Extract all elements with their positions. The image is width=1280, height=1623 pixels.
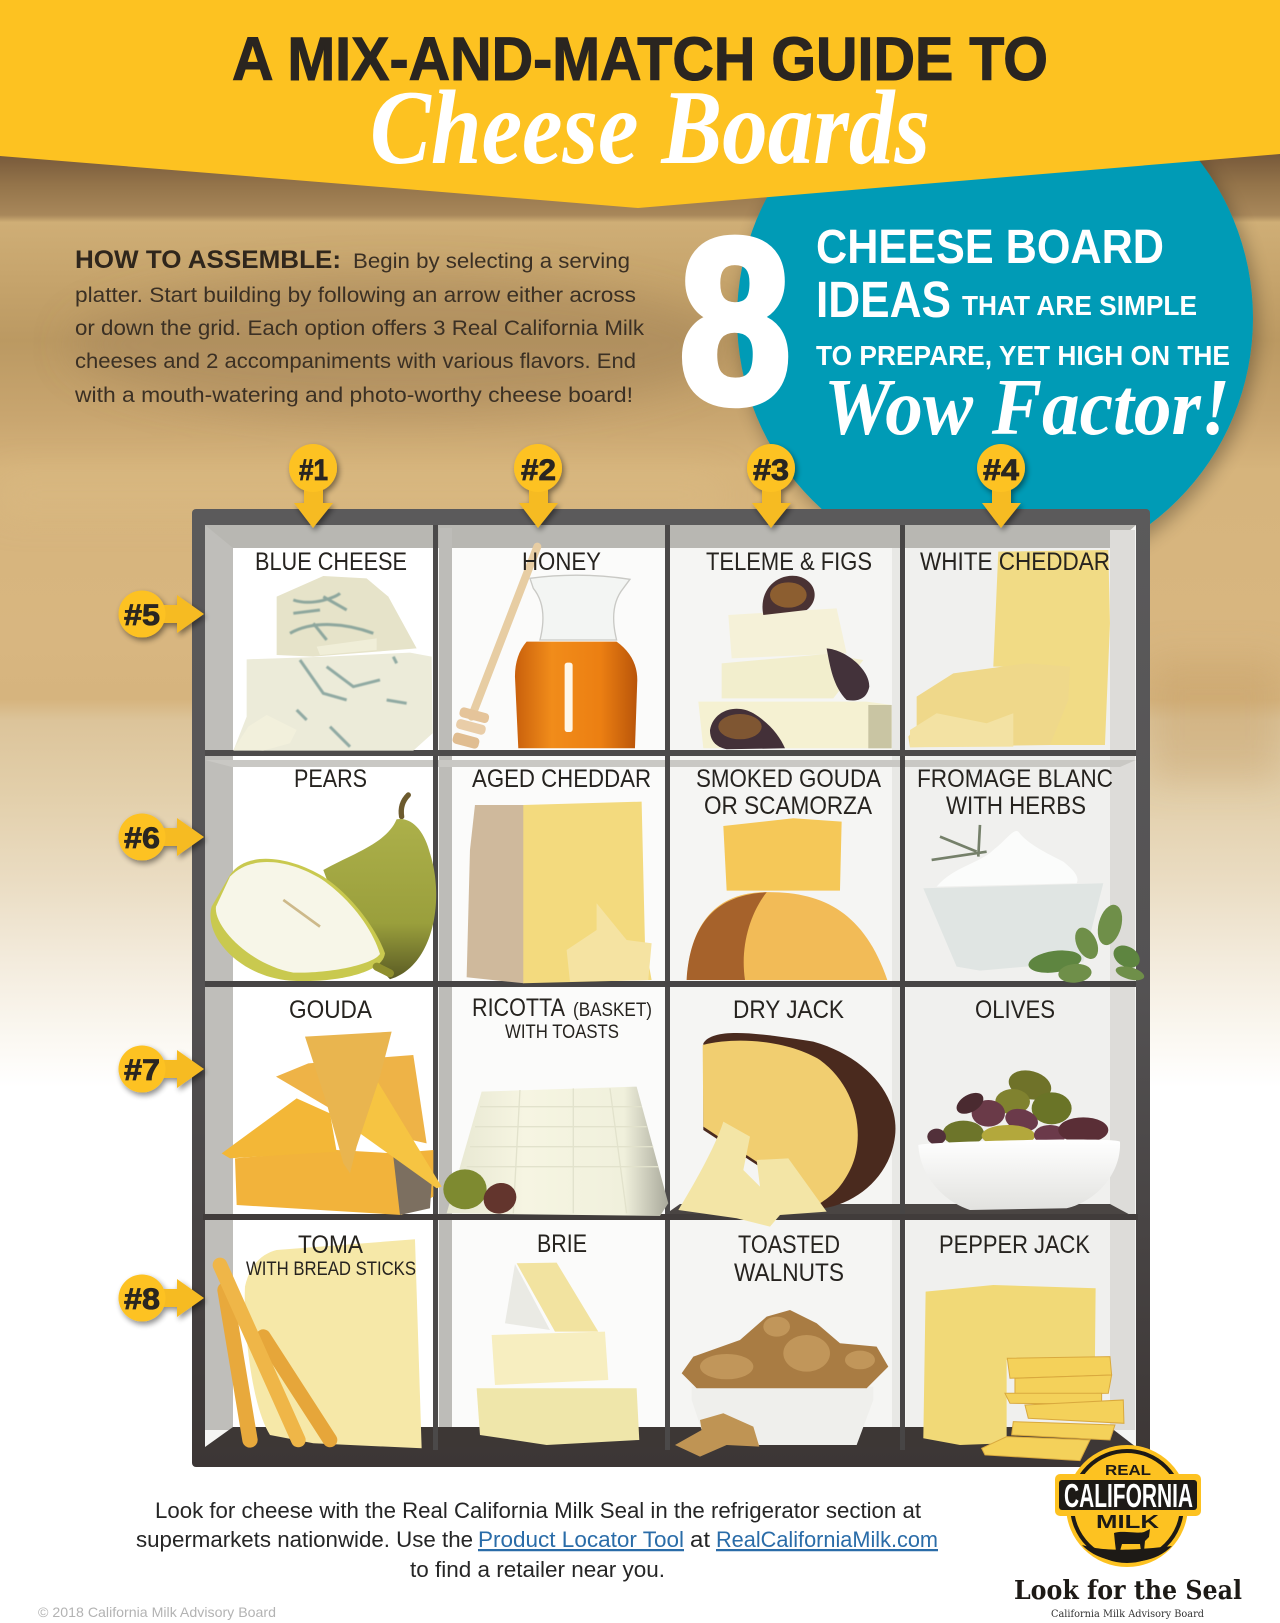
cell: honey: [452, 547, 637, 750]
seal logo: MILK: [1096, 1512, 1159, 1532]
arrow badge #2: #2: [521, 454, 556, 487]
column 2 side wall: [439, 528, 452, 1428]
how to assemble text block: HOW TO ASSEMBLE:: [75, 246, 341, 274]
cell: blue cheese: BLUE CHEESE: [255, 548, 407, 576]
arrow badge #5: #5: [124, 599, 160, 632]
how to assemble text block: cheeses and 2 accompaniments with various flavors. End: [75, 349, 636, 373]
teal panel text: TO PREPARE, YET HIGH ON THE: [816, 340, 1230, 371]
cow and hill silhouette: [1082, 1529, 1172, 1562]
big number 8: 8: [679, 190, 791, 452]
arrow badge #2: [514, 444, 562, 528]
footer call to action text: at: [690, 1527, 711, 1552]
footer call to action text: supermarkets nationwide. Use the: [136, 1527, 473, 1552]
arrow badge #8: #8: [124, 1283, 160, 1316]
copyright: © 2018 California Milk Advisory Board: [38, 1604, 276, 1620]
arrow badge #5: [118, 590, 204, 638]
cell: ricotta with olives: (BASKET): [573, 999, 652, 1021]
cell: aged cheddar: [467, 765, 652, 983]
shelf grid frame: [192, 509, 1150, 1467]
cell: pepper jack: PEPPER JACK: [939, 1231, 1090, 1259]
cell: dry jack: DRY JACK: [733, 996, 844, 1024]
cell: gouda: GOUDA: [289, 996, 372, 1024]
cell: pears: PEARS: [294, 765, 367, 793]
cell: smoked gouda: [687, 765, 887, 980]
floors: [205, 1427, 1136, 1447]
dividers: [433, 525, 438, 1450]
cell: ricotta with olives: RICOTTA: [472, 994, 565, 1022]
footer call to action text: Look for cheese with the Real California Milk Seal in the refrigerator section at: [155, 1498, 922, 1523]
teal panel text: [816, 221, 1230, 452]
teal panel text: CHEESE BOARD: [816, 221, 1164, 274]
arrow badge #4: #4: [983, 454, 1019, 487]
cell: teleme and figs: [698, 548, 892, 749]
how to assemble text block: or down the grid. Each option offers 3 Real California Milk: [75, 316, 644, 340]
cell: fromage blanc: [917, 765, 1146, 984]
cell: toma with bread sticks: [220, 1231, 422, 1448]
right side wall: [1110, 530, 1135, 1430]
cell: toasted walnuts: TOASTED: [738, 1231, 840, 1259]
footer call to action text: Product Locator Tool: [478, 1527, 684, 1552]
cell: brie: [477, 1230, 639, 1445]
seal logo: REAL: [1105, 1462, 1151, 1479]
footer call to action text: [136, 1498, 938, 1582]
arrow badge #7: #7: [124, 1054, 160, 1087]
footer call to action text: RealCaliforniaMilk.com: [716, 1527, 938, 1552]
teal circle panel: [737, 60, 1253, 576]
title line one: A MIX-AND-MATCH GUIDE TO: [232, 25, 1048, 93]
arrow badge #1: #1: [299, 454, 328, 487]
cell: aged cheddar: AGED CHEDDAR: [472, 765, 651, 793]
cell: teleme and figs: TELEME & FIGS: [706, 548, 872, 576]
cell: toma with bread sticks: WITH BREAD STICKS: [246, 1258, 416, 1280]
white backs, left column: [233, 548, 436, 1428]
arrow badge #8: [118, 1274, 204, 1322]
cell: smoked gouda: SMOKED GOUDA: [696, 765, 881, 793]
seal logo: [1014, 1445, 1242, 1620]
arrow badge #3: [747, 444, 795, 528]
arrow badge #6: [118, 814, 204, 860]
yellow title banner: [0, 0, 1280, 208]
cell: fromage blanc: FROMAGE BLANC: [917, 765, 1113, 793]
arrow badge #3: #3: [753, 454, 789, 487]
look for the seal wordmark: Look for the Seal: [1014, 1576, 1242, 1606]
seal logo: CALIFORNIA: [1064, 1477, 1193, 1514]
cell: ricotta with olives: WITH TOASTS: [505, 1021, 619, 1043]
cell: blue cheese: [233, 548, 433, 751]
cell: dry jack: [678, 996, 895, 1227]
cell: honey: HONEY: [522, 548, 601, 576]
cell: pears: [210, 765, 436, 981]
how to assemble text block: Begin by selecting a serving: [353, 249, 630, 273]
arrow badge #6: #6: [124, 822, 160, 855]
how to assemble text block: platter. Start building by following an arrow either across: [75, 283, 636, 307]
cell: olives: [918, 996, 1120, 1210]
cell: olives: OLIVES: [975, 996, 1055, 1024]
cell: toasted walnuts: WALNUTS: [734, 1259, 844, 1287]
teal panel text: THAT ARE SIMPLE: [962, 290, 1197, 321]
cell: fromage blanc: WITH HERBS: [946, 792, 1086, 820]
how to assemble text block: with a mouth-watering and photo-worthy cheese board!: [74, 383, 633, 407]
arrow badge #7: [118, 1046, 204, 1092]
cell: white cheddar: [908, 548, 1110, 747]
advisory board line: California Milk Advisory Board: [1051, 1608, 1204, 1620]
cell: brie: BRIE: [537, 1230, 587, 1258]
arrow badge #1: [289, 444, 337, 528]
arrow badge #4: [977, 444, 1025, 528]
cell: smoked gouda: OR SCAMORZA: [704, 792, 872, 820]
cell: toasted walnuts: [675, 1231, 888, 1457]
teal panel text: Wow Factor!: [824, 364, 1230, 452]
title script line: Cheese Boards: [370, 69, 930, 186]
cell: pepper jack: [923, 1231, 1124, 1461]
cell: white cheddar: WHITE CHEDDAR: [920, 548, 1110, 576]
top walls: [205, 525, 1136, 548]
cell: ricotta with olives: [443, 994, 668, 1219]
how to assemble text block: [74, 246, 644, 407]
teal panel text: IDEAS: [816, 271, 951, 328]
footer call to action text: to find a retailer near you.: [410, 1557, 665, 1582]
left side walls: [205, 525, 233, 1430]
cell: gouda: [222, 996, 442, 1215]
cell: toma with bread sticks: TOMA: [298, 1231, 363, 1259]
